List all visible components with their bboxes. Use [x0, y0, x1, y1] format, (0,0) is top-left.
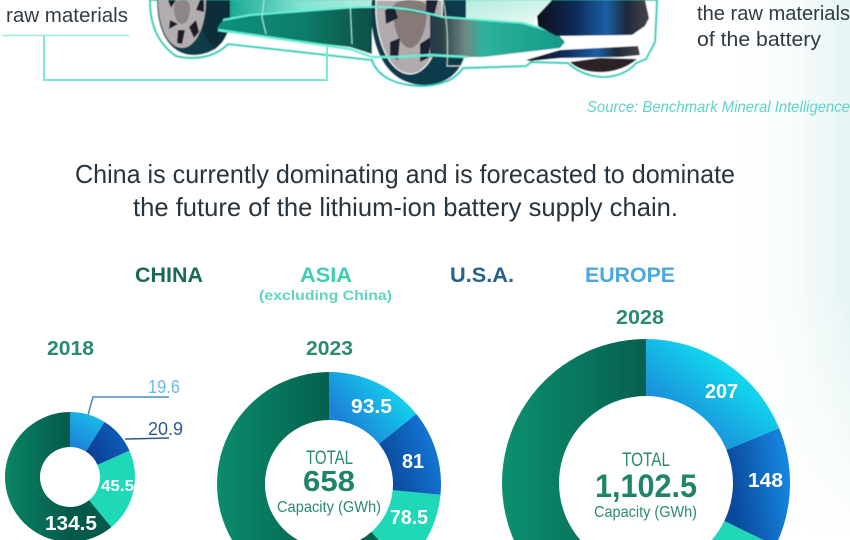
- connector line to battery: [44, 36, 327, 80]
- value 45.5: 45.5: [101, 478, 134, 495]
- legend: [135, 264, 675, 303]
- legend: Europe: EUROPE: [585, 264, 675, 287]
- legend: Asia: (excluding China): [259, 287, 392, 303]
- windscreen: [537, 0, 649, 36]
- value 93.5: 93.5: [351, 396, 392, 418]
- total 658: 658: [303, 466, 355, 498]
- heading: the future of the lithium-ion battery supply chain.: [133, 192, 678, 222]
- donut chart: 2018: [5, 338, 183, 540]
- background tint: [793, 0, 850, 462]
- total 658: Capacity (GWh): [277, 499, 381, 516]
- total 658: [277, 448, 381, 516]
- total 1,102.5: 1,102.5: [595, 468, 697, 504]
- year 2028: 2028: [616, 307, 664, 329]
- rear wheel: [157, 0, 230, 55]
- donut rings 2018: [5, 412, 135, 540]
- value 20.9: [125, 419, 183, 439]
- value 148: 148: [748, 470, 783, 492]
- total 1,102.5: TOTAL: [622, 450, 670, 471]
- callout: raw materials left: raw materials: [6, 5, 128, 27]
- legend: China: CHINA: [135, 264, 203, 287]
- value 20.9: 20.9: [148, 419, 183, 439]
- legend: Asia: [259, 264, 392, 303]
- heading: [75, 159, 735, 222]
- total 1,102.5: [594, 450, 697, 521]
- heading: China is currently dominating and is forecasted to dominate: [75, 159, 735, 189]
- battery pack: [217, 0, 565, 66]
- callout: raw materials right: of the battery: [697, 29, 821, 51]
- front tyre: [570, 58, 637, 72]
- legend: USA: U.S.A.: [450, 264, 514, 287]
- value 78.5: 78.5: [390, 507, 428, 529]
- total 658: TOTAL: [306, 448, 353, 469]
- value 134.5: 134.5: [45, 513, 97, 535]
- total 1,102.5: Capacity (GWh): [594, 504, 697, 521]
- donut rings 2028: [502, 339, 790, 540]
- year 2023: 2023: [306, 338, 353, 360]
- year 2018: 2018: [47, 338, 94, 360]
- callout: raw materials right: [697, 3, 850, 51]
- value 81: 81: [402, 451, 424, 473]
- value 207: 207: [705, 381, 738, 403]
- car body panel: [222, 0, 375, 34]
- donut chart: 2023: [217, 338, 441, 540]
- callout: raw materials left: [2, 5, 129, 36]
- legend: Asia: ASIA: [300, 264, 352, 287]
- hood panel: [440, 0, 552, 26]
- front-axle wheel: [371, 0, 466, 85]
- value 19.6: 19.6: [148, 377, 180, 397]
- value 19.6: [88, 377, 180, 415]
- car outline: [150, 0, 657, 86]
- front bumper: [526, 46, 640, 61]
- illustration: electric car with battery: [150, 0, 657, 86]
- donut chart: 2028: [502, 307, 790, 540]
- callout: raw materials right: the raw materials: [697, 3, 850, 25]
- donut rings 2023: [217, 372, 441, 540]
